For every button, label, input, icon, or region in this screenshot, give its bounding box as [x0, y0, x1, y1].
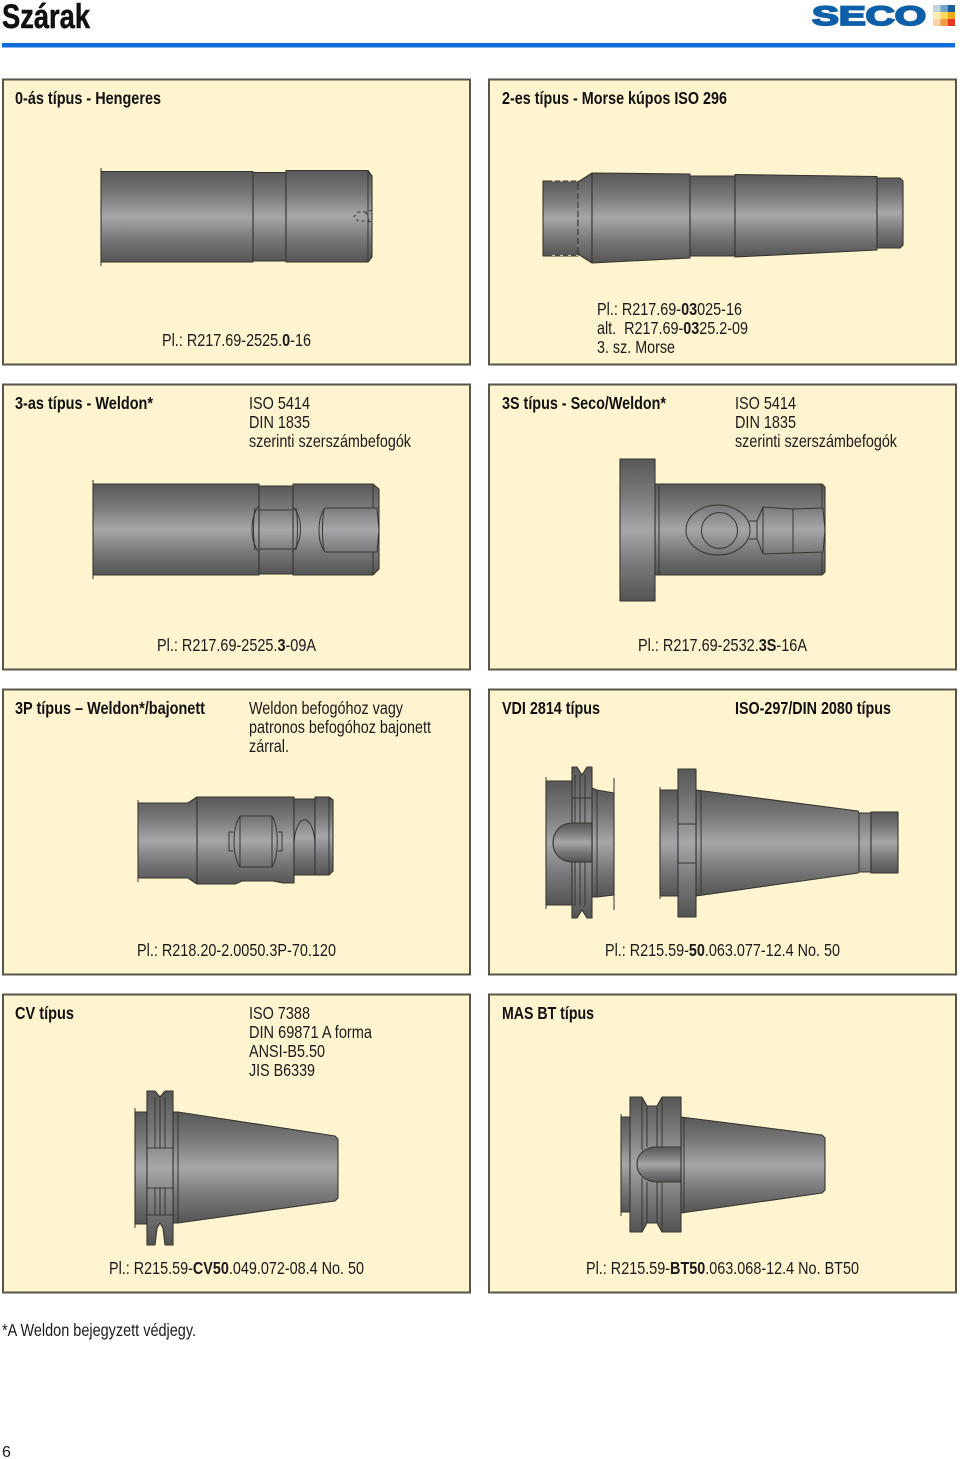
heading: 3-as típus - Weldon* — [15, 393, 153, 413]
drawing: cylindrical shank — [101, 168, 372, 266]
footnote: *A Weldon bejegyzett védjegy. — [2, 1320, 196, 1340]
drawing: Seco/Weldon shank — [620, 459, 825, 601]
part number: Pl.: R215.59-CV50.049.072-08.4 No. 50 — [109, 1258, 364, 1278]
description: zárral. — [249, 736, 289, 756]
part numbers: 3. sz. Morse — [597, 337, 675, 357]
standards: ISO 5414 — [735, 393, 796, 413]
part numbers — [597, 299, 748, 357]
heading: 3P típus – Weldon*/bajonett — [15, 698, 205, 718]
standards: ISO 5414 — [249, 393, 310, 413]
part numbers: alt. R217.69-0325.2-09 — [597, 318, 748, 338]
logo: SECO: SECO — [812, 1, 926, 31]
part number: Pl.: R217.69-2525.0-16 — [162, 330, 311, 350]
drawing: Morse taper shank — [543, 173, 903, 263]
standards: DIN 1835 — [249, 412, 310, 432]
panel: 3-as típus — [3, 384, 470, 670]
drawing: MAS BT holder — [621, 1097, 825, 1232]
part numbers: Pl.: R217.69-03025-16 — [597, 299, 742, 319]
part number: Pl.: R218.20-2.0050.3P-70.120 — [137, 940, 336, 960]
heading: MAS BT típus — [502, 1003, 594, 1023]
part number: Pl.: R217.69-2525.3-09A — [157, 635, 316, 655]
description: patronos befogóhoz bajonett — [249, 717, 431, 737]
standards: ANSI-B5.50 — [249, 1041, 325, 1061]
part number: Pl.: R217.69-2532.3S-16A — [638, 635, 807, 655]
heading: CV típus — [15, 1003, 74, 1023]
standards — [249, 393, 411, 451]
standards: szerinti szerszámbefogók — [249, 431, 411, 451]
description: Weldon befogóhoz vagy — [249, 698, 403, 718]
standards: JIS B6339 — [249, 1060, 315, 1080]
drawing: CV holder — [135, 1091, 338, 1245]
heading: VDI: VDI 2814 típus — [502, 698, 600, 718]
panel: 0-ás típus — [3, 80, 470, 364]
standards: DIN 1835 — [735, 412, 796, 432]
part number: Pl.: R215.59-BT50.063.068-12.4 No. BT50 — [586, 1258, 859, 1278]
standards — [249, 1003, 372, 1080]
drawing: VDI holder — [546, 767, 614, 918]
logo: SECO — [812, 1, 955, 31]
heading: 3S típus - Seco/Weldon* — [502, 393, 666, 413]
heading: 0-ás típus - Hengeres — [15, 88, 161, 108]
panel: VDI 2814 / ISO-297 — [489, 690, 956, 974]
drawing: ISO-297 holder — [660, 769, 898, 917]
heading: ISO-297: ISO-297/DIN 2080 típus — [735, 698, 891, 718]
panel: 3P típus — [3, 690, 470, 974]
header rule — [2, 43, 955, 48]
standards: szerinti szerszámbefogók — [735, 431, 897, 451]
panel: CV típus — [3, 994, 470, 1292]
panel: 2-es típus — [489, 80, 956, 364]
panel: 3S típus — [489, 384, 956, 670]
standards: ISO 7388 — [249, 1003, 310, 1023]
standards — [735, 393, 897, 451]
description — [249, 698, 431, 756]
part number: Pl.: R215.59-50.063.077-12.4 No. 50 — [605, 940, 840, 960]
heading: 2-es típus - Morse kúpos ISO 296 — [502, 88, 727, 108]
panel: MAS BT típus — [489, 994, 956, 1292]
drawing: bayonet shank — [138, 797, 333, 884]
drawing: Weldon shank — [93, 480, 379, 579]
standards: DIN 69871 A forma — [249, 1022, 372, 1042]
